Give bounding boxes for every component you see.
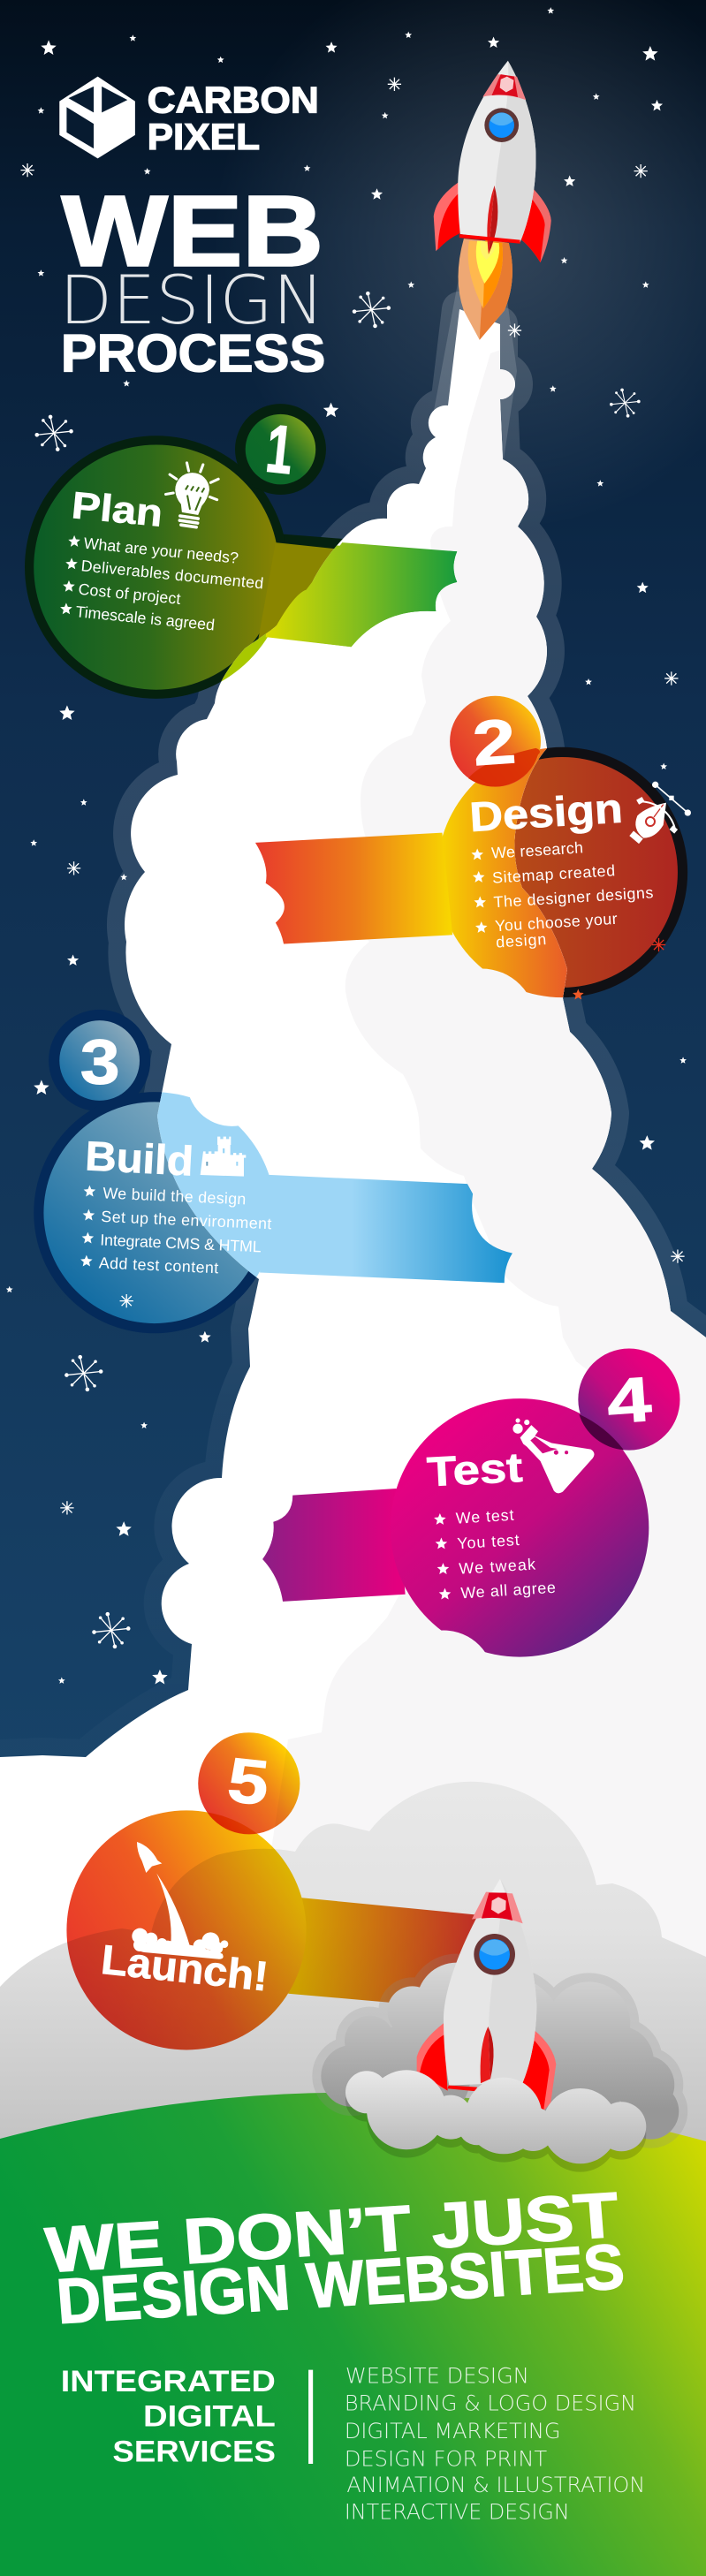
design heading: Design	[468, 785, 624, 840]
title: PROCESS	[61, 323, 325, 383]
grey ground clouds	[0, 1782, 706, 2173]
nose band	[482, 74, 526, 100]
icon: cube	[59, 77, 135, 158]
design checklist: The designer designs	[493, 883, 654, 911]
badge 4	[578, 1348, 679, 1451]
icon: pen tool	[629, 782, 691, 844]
icon: castle	[201, 1137, 246, 1177]
plan checklist: What are your needs?	[83, 534, 239, 567]
fins	[417, 2023, 448, 2091]
plan checklist: Deliverables documented	[80, 557, 264, 592]
badge 3: 3	[80, 1027, 120, 1097]
slogan	[43, 2180, 627, 2337]
body	[444, 1879, 536, 2086]
integrated digital services: SERVICES	[112, 2435, 276, 2468]
top rocket	[434, 61, 551, 340]
test checklist	[434, 1506, 556, 1602]
build checklist: Integrate CMS & HTML	[100, 1231, 262, 1255]
build heading: Build	[84, 1133, 194, 1185]
plan checklist: Cost of project	[78, 580, 181, 608]
test checklist: You test	[457, 1531, 520, 1552]
build checklist	[80, 1184, 272, 1307]
nose band	[472, 1892, 523, 1923]
design checklist: Sitemap created	[492, 861, 616, 887]
build checklist: Set up the environment	[101, 1208, 272, 1232]
test checklist: We tweak	[459, 1556, 536, 1578]
integrated digital services	[61, 2364, 313, 2468]
panel 1: Plan	[25, 412, 457, 699]
launch circle	[66, 1810, 307, 2049]
icon: flask	[512, 1418, 595, 1493]
wordmark: PIXEL	[148, 116, 260, 157]
green hill	[0, 2093, 706, 2576]
icon: light bulb	[166, 463, 218, 527]
build checklist: We build the design	[102, 1184, 247, 1208]
plan checklist	[60, 534, 264, 634]
design tab	[255, 833, 452, 943]
launch pad front cloud	[345, 2070, 646, 2172]
build bright overlap on smoke	[157, 1092, 269, 1277]
design panel: dark backing over the sky	[437, 747, 687, 997]
panel 3: Build	[34, 1020, 512, 1333]
smoke shaded side	[272, 350, 706, 1956]
body	[458, 61, 536, 242]
badge 5: 5	[224, 1745, 272, 1819]
plan tab right end	[270, 542, 457, 647]
plan checklist: Timescale is agreed	[75, 602, 216, 634]
integrated digital services: DIGITAL	[143, 2398, 276, 2433]
flame	[459, 239, 512, 340]
wordmark: CARBON	[148, 79, 319, 120]
services list: DESIGN FOR PRINT	[345, 2447, 547, 2471]
badge 1	[246, 412, 315, 489]
plan panel: dark backing over the sky	[25, 404, 361, 699]
badge 2: 2	[470, 706, 518, 779]
rocket on launch pad	[417, 1879, 556, 2111]
smoke trail	[0, 309, 706, 2209]
design checklist: design	[496, 930, 547, 951]
title	[59, 176, 325, 383]
services list: BRANDING & LOGO DESIGN	[345, 2391, 636, 2415]
test checklist: We test	[455, 1506, 514, 1527]
slogan: WE DON’T JUST	[43, 2180, 621, 2286]
design checklist: You choose your	[495, 910, 618, 935]
test heading: Test	[426, 1444, 524, 1495]
title: DESIGN	[59, 261, 324, 339]
icon: launching rocket	[132, 1842, 228, 1959]
build checklist: Add test content	[98, 1254, 219, 1277]
title: WEB	[62, 176, 323, 287]
services list: WEBSITE DESIGN	[345, 2364, 529, 2388]
window	[484, 108, 519, 142]
panel 4: Test	[262, 1348, 679, 1731]
starfield: stars and sparkles	[6, 7, 687, 1684]
services list: DIGITAL MARKETING	[345, 2419, 560, 2443]
build panel: dark backing over the sky	[34, 1010, 275, 1333]
launch pad back cloud	[321, 1963, 679, 2140]
panel 5: Launch	[66, 1810, 477, 2049]
wordmark	[148, 79, 319, 157]
panel 2: Design	[255, 696, 691, 1077]
background: night sky	[0, 0, 706, 1855]
launch heading: Launch!	[99, 1936, 270, 2000]
centre fin	[481, 2027, 490, 2083]
design checklist: We research	[491, 838, 583, 862]
logo	[59, 77, 319, 158]
plan heading: Plan	[70, 484, 164, 535]
services list: ANIMATION & ILLUSTRATION	[346, 2473, 645, 2497]
badge 4: 4	[604, 1364, 654, 1437]
test checklist: We all agree	[460, 1579, 556, 1602]
window	[474, 1934, 515, 1975]
plan bright overlap on smoke	[221, 546, 458, 682]
badge 5	[198, 1732, 300, 1834]
services list: INTERACTIVE DESIGN	[345, 2500, 570, 2524]
design checklist	[471, 838, 665, 999]
test circle	[391, 1398, 649, 1731]
test tab	[262, 1489, 406, 1602]
integrated digital services: INTEGRATED	[61, 2364, 276, 2398]
centre fin	[487, 186, 495, 254]
launch tab	[288, 1898, 477, 2010]
design bright overlap on smoke	[442, 747, 567, 998]
services list	[345, 2364, 645, 2524]
badge 3	[59, 1020, 140, 1101]
fins	[434, 182, 460, 251]
badge 2	[450, 696, 541, 787]
badge 1: 1	[262, 412, 297, 489]
build tab	[260, 1175, 512, 1283]
slogan: DESIGN WEBSITES	[54, 2231, 627, 2337]
smoke halo	[0, 274, 706, 2209]
